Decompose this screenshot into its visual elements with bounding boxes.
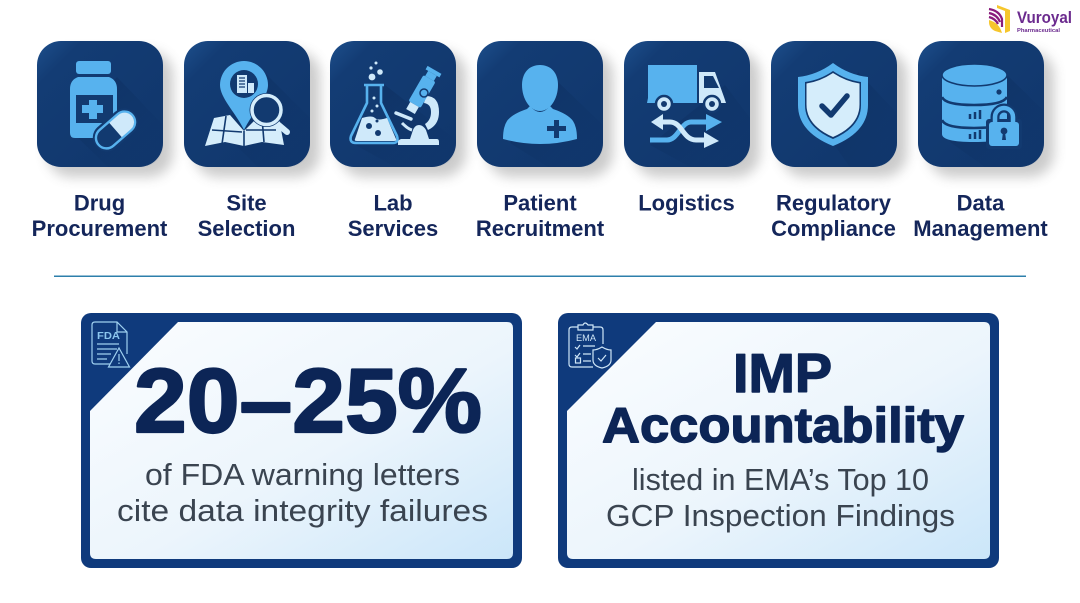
logo: Vuroyal Pharmaceutical: Pharmaceutical (1017, 28, 1060, 34)
stat: 20-25%: 20–25% (134, 351, 482, 452)
icon: database with padlock (942, 64, 1022, 149)
text: FDA caption: cite data integrity failures (117, 493, 488, 528)
label: Logistics: Logistics (638, 190, 735, 216)
tile: Data Management (913, 41, 1054, 241)
heading: IMP Accountability (602, 342, 964, 453)
label: Lab Services: Services (348, 216, 438, 241)
label: Site Selection: Site (226, 190, 267, 216)
label: Site Selection: Selection (198, 216, 295, 241)
icon: EMA clipboard with shield: EMA (576, 333, 597, 344)
icon: FDA document with warning (92, 322, 130, 367)
tile: Logistics (624, 41, 760, 216)
logo: Vuroyal Pharmaceutical: Vuroyal (1017, 8, 1072, 27)
text: FDA caption: of FDA warning letters (145, 457, 460, 492)
label: Data Management: Management (913, 216, 1048, 241)
icon: patient with medical cross (503, 65, 577, 144)
text: EMA caption: listed in EMA’s Top 10 (632, 462, 929, 497)
icon: EMA clipboard with shield (569, 323, 611, 368)
icon: medicine bottle and capsule (70, 61, 144, 157)
label: Drug Procurement: Drug (74, 190, 125, 216)
logo: Vuroyal Pharmaceutical (989, 5, 1072, 34)
icon: shield with check mark (798, 63, 868, 146)
label: Data Management: Data (957, 190, 1004, 216)
heading: IMP Accountability: IMP (733, 342, 832, 404)
label: Regulatory Compliance: Compliance (771, 216, 896, 241)
label: Patient Recruitment: Patient (503, 190, 577, 216)
icon: FDA document with warning: FDA (97, 331, 120, 342)
icon: truck and crossing arrows (647, 65, 726, 148)
tile: Lab Services (330, 41, 466, 241)
label: Regulatory Compliance: Regulatory (776, 190, 891, 216)
label: Drug Procurement: Procurement (32, 216, 168, 241)
panel: EMA findings (558, 313, 999, 568)
tile: Patient Recruitment (476, 41, 613, 241)
text: EMA caption: GCP Inspection Findings (606, 498, 955, 533)
tile: Regulatory Compliance (771, 41, 907, 241)
label: Patient Recruitment: Recruitment (476, 216, 605, 241)
tile: Drug Procurement (32, 41, 173, 241)
heading: IMP Accountability: Accountability (602, 399, 964, 453)
text: FDA caption (117, 457, 488, 528)
label: Lab Services: Lab (373, 190, 413, 216)
panel: FDA warning letters (81, 313, 522, 568)
tile: Site Selection (184, 41, 320, 241)
text: EMA caption (606, 462, 955, 533)
icon: map pin, map and magnifier (205, 61, 287, 146)
icon: flask and microscope (351, 62, 441, 145)
